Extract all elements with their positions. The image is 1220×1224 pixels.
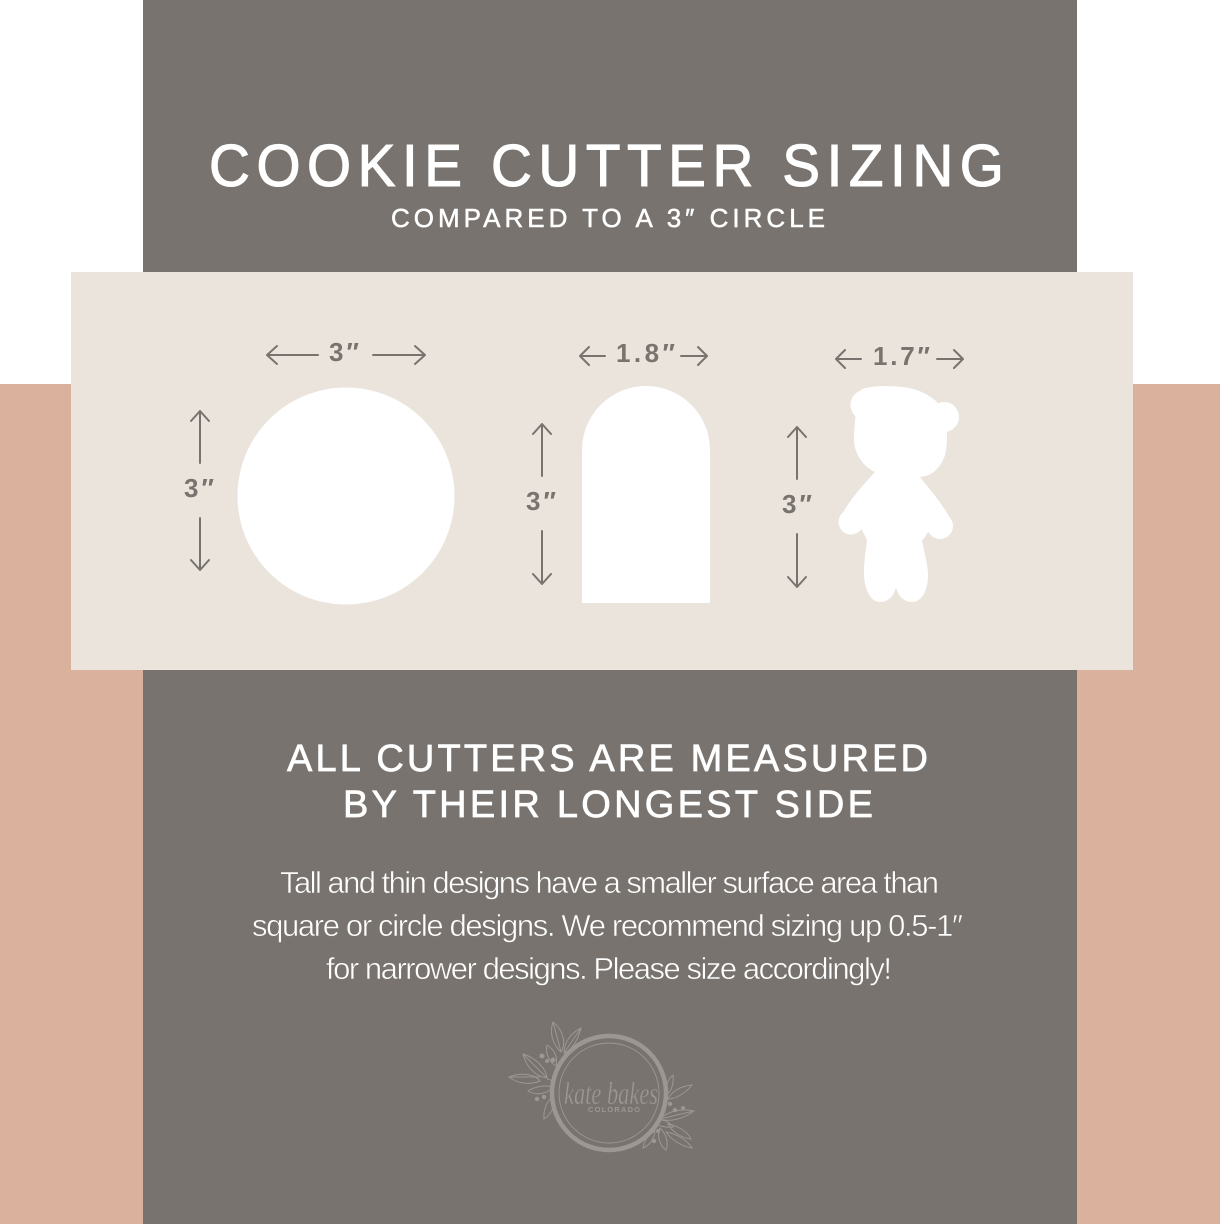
logo berries bottom right <box>652 1102 685 1143</box>
bear dimensions: 3 ″ <box>782 489 812 519</box>
logo leaves top left <box>509 1022 581 1119</box>
subtitle: COMPARED TO A 3″ CIRCLE <box>391 203 825 233</box>
background: gray central column <box>143 0 1077 1224</box>
shape: bear with dimensions <box>838 386 959 602</box>
title: COOKIE CUTTER SIZING <box>209 134 1004 199</box>
background: pink side bands <box>0 384 1220 1224</box>
bear dimensions <box>782 341 963 587</box>
body text: square or circle designs. We recommend sizing up 0.5-1″ <box>252 908 963 943</box>
panel: shape comparison <box>71 272 1133 670</box>
shape: 3 inch circle with dimensions <box>184 337 454 604</box>
shape: arch with dimensions <box>526 338 710 603</box>
bear dimensions: 1.7″ <box>873 341 930 371</box>
logo berries top left <box>535 1054 556 1101</box>
shape: 3 inch circle with dimensions: 3 ″ <box>184 473 214 503</box>
logo place name: COLORADO <box>588 1105 640 1114</box>
logo rings <box>552 1036 666 1150</box>
shape: arch with dimensions: 1.8″ <box>616 338 675 368</box>
logo script name: kate bakes <box>564 1075 658 1111</box>
shape: 3 inch circle with dimensions: 3 ″ <box>329 337 359 367</box>
body text: Tall and thin designs have a smaller surface area than <box>280 865 939 900</box>
heading: measurement note: BY THEIR LONGEST SIDE <box>343 784 873 826</box>
heading: measurement note: ALL CUTTERS ARE MEASURED <box>287 738 928 780</box>
body text: for narrower designs. Please size accordingly! <box>326 951 892 986</box>
logo leaves bottom right <box>643 1075 694 1150</box>
logo: kate bakes colorado <box>509 1022 694 1150</box>
heading: measurement note <box>287 738 928 826</box>
body text <box>252 865 963 986</box>
shape: arch with dimensions: 3 ″ <box>526 486 556 516</box>
